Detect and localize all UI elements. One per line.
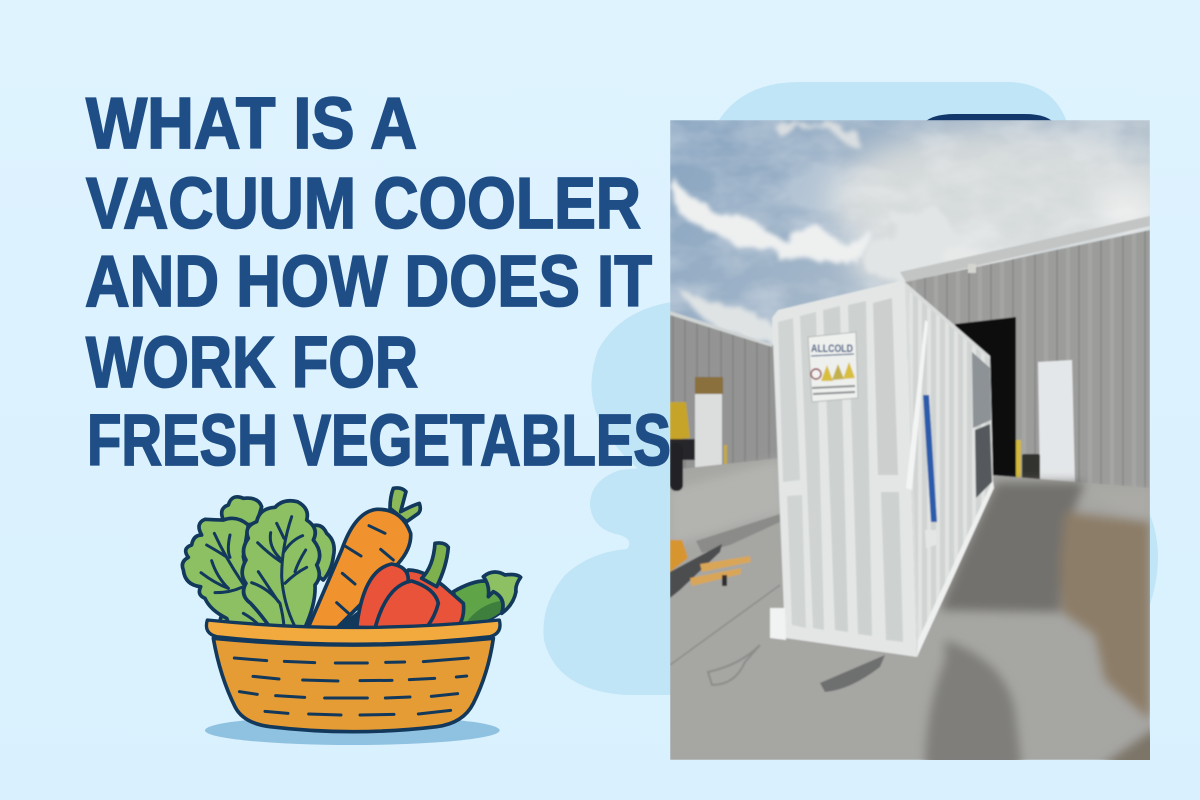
warning sign on container: ALLCOLD: [811, 343, 853, 355]
basket weave dashes: [234, 658, 468, 715]
vacuum cooler container: [770, 281, 994, 657]
title: FRESH VEGETABLES: [87, 401, 671, 481]
carrot: [308, 488, 420, 628]
dark gap wedge: [335, 612, 358, 629]
pallet jack: [670, 540, 751, 598]
warning sign on container: [808, 332, 858, 402]
basket shadow: [205, 716, 500, 745]
right warehouse: [900, 216, 1150, 504]
cucumber: [453, 572, 521, 626]
red pepper: [357, 543, 464, 628]
title: AND HOW DOES IT: [85, 242, 652, 322]
basket rim: [206, 620, 500, 644]
dark pill behind photo: [922, 114, 1056, 125]
left warehouse: [670, 310, 778, 470]
lettuce centre leaf: [242, 501, 320, 627]
ground: [670, 458, 1160, 770]
title: [85, 84, 671, 481]
lettuce left leaf: [182, 518, 270, 627]
yellow machine: [670, 402, 695, 491]
icon: vegetable basket: [182, 488, 521, 745]
decorative blob cluster: [543, 82, 1158, 695]
basket body: [213, 638, 493, 732]
back lettuce leaves: [220, 497, 334, 627]
title: WHAT IS A: [86, 84, 417, 164]
photo: vacuum cooler container outside warehouse: [670, 120, 1170, 770]
title: VACUUM COOLER: [86, 164, 641, 244]
title: WORK FOR: [86, 323, 418, 403]
sky with clouds: [670, 120, 1170, 360]
